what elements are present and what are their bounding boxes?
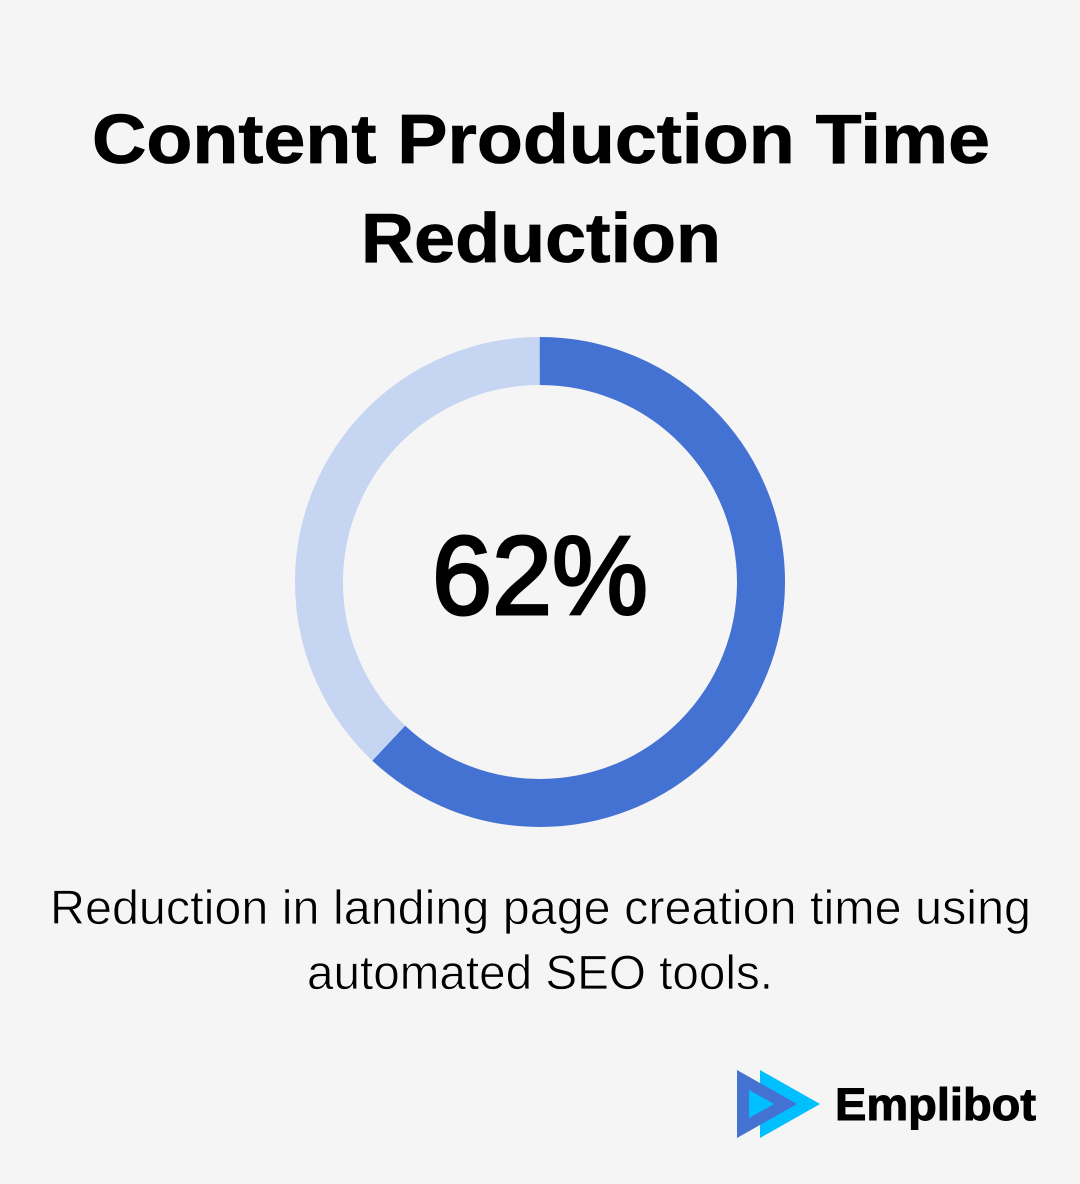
title: Content Production Time [92, 100, 990, 178]
percentage value: 62% [432, 514, 648, 638]
donut chart: 62% [319, 361, 761, 803]
description: automated SEO tools. [307, 947, 773, 1000]
donut track [319, 361, 761, 803]
donut value arc [319, 361, 761, 803]
title: Reduction [361, 199, 721, 277]
title [92, 100, 990, 277]
icon: play triangles [737, 1070, 820, 1138]
wordmark: Emplibot [835, 1079, 1036, 1130]
description [50, 882, 1031, 1000]
description: Reduction in landing page creation time using [50, 882, 1031, 935]
logo: Emplibot [737, 1070, 1036, 1138]
